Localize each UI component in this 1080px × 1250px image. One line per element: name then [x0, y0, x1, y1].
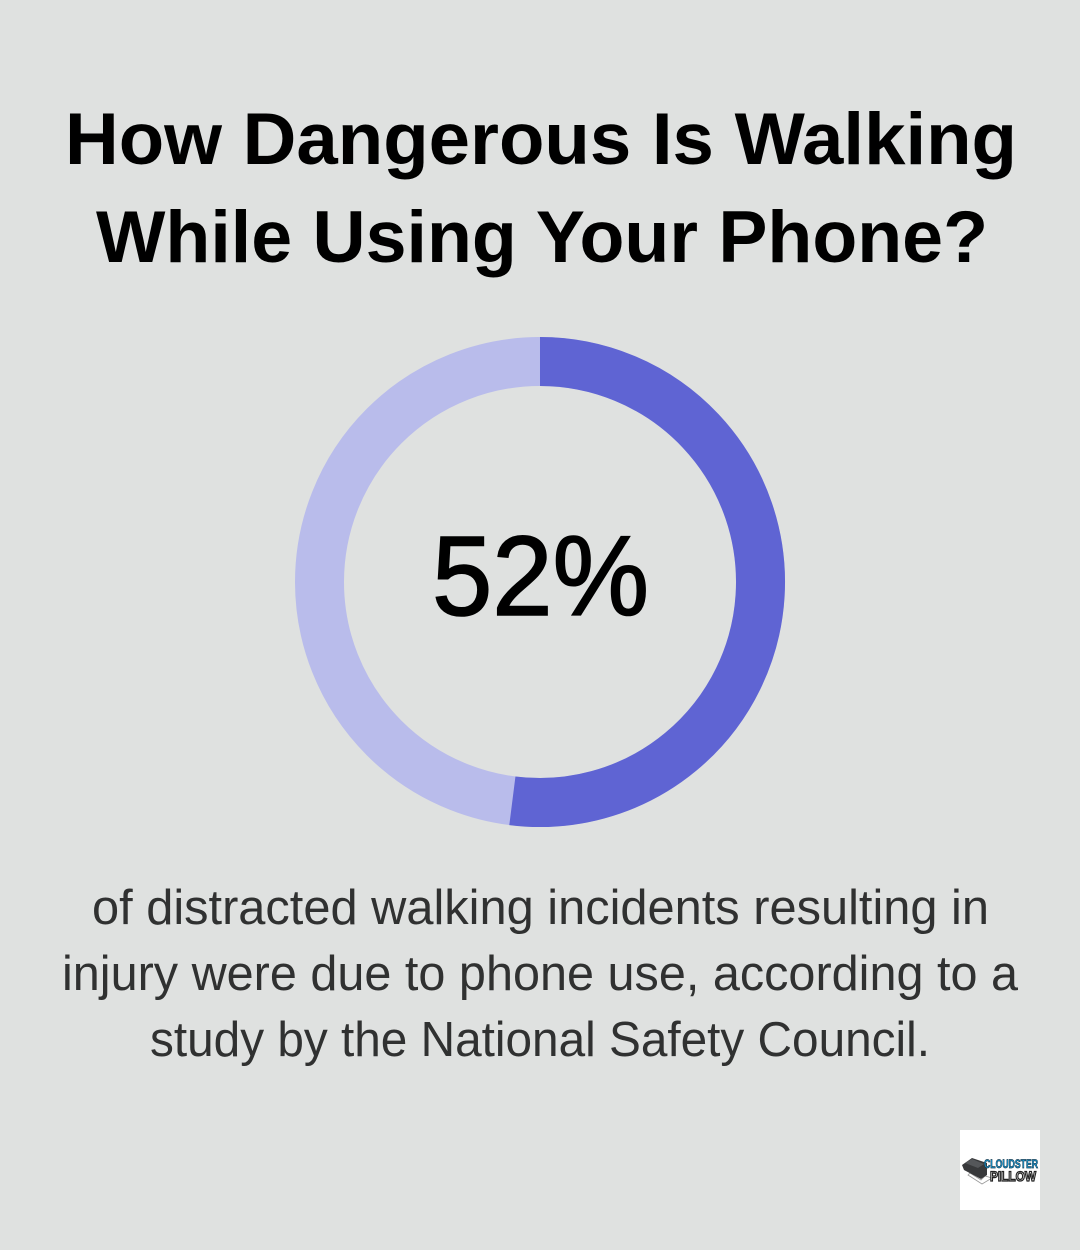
donut track	[320, 362, 760, 802]
icon: pillow	[962, 1158, 992, 1184]
logo: Cloudster Pillow	[960, 1130, 1040, 1210]
title	[65, 99, 1017, 278]
logo wordmark: CLOUDSTER	[984, 1157, 1038, 1171]
logo background	[960, 1130, 1040, 1210]
description text	[62, 881, 1019, 1067]
description text: injury were due to phone use, according to a	[62, 947, 1019, 1001]
title: How Dangerous Is Walking	[65, 99, 1017, 180]
description text: study by the National Safety Council.	[150, 1013, 930, 1067]
logo wordmark: PILLOW	[990, 1168, 1037, 1184]
description text: of distracted walking incidents resulting in	[92, 881, 989, 935]
logo wordmark	[984, 1157, 1038, 1184]
donut value arc	[512, 362, 761, 802]
stat value: 52%	[432, 513, 649, 639]
donut chart: 52%	[320, 362, 761, 802]
title: While Using Your Phone?	[96, 197, 988, 278]
